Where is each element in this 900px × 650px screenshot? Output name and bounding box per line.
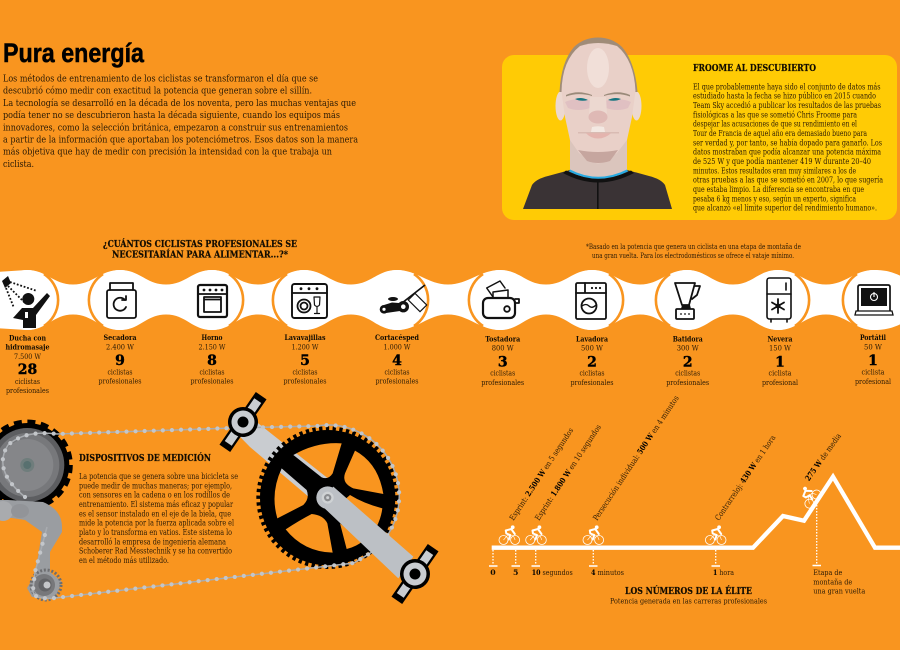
appliance label: nevera: ciclista <box>768 368 792 378</box>
appliance label: batidora <box>666 334 709 387</box>
appliance label: tostadora: profesionales <box>481 378 524 387</box>
appliance label: lavadora: profesionales <box>570 378 614 387</box>
intro text: descubrió cómo medir con exactitud la potencia que generan sobre el sillín. <box>3 86 312 97</box>
appliance label: cortacésped <box>375 333 419 386</box>
appliance label: nevera <box>762 334 798 387</box>
cyclist icon: 4 minutes <box>583 525 604 544</box>
text block: dispositivos de medición <box>79 452 238 565</box>
appliance label: nevera: profesional <box>762 378 798 387</box>
text block: dispositivos de medición: con sensores en la cadena o en los rodillos de <box>79 490 230 500</box>
intro text <box>3 74 359 170</box>
appliance label: lavadora: 2 <box>587 354 597 370</box>
footnote <box>586 242 801 260</box>
text block: dispositivos de medición: entrenamiento. El sistema más eficaz y popular <box>79 499 233 509</box>
appliance label: horno <box>190 333 234 386</box>
appliance label: batidora: Batidora <box>673 334 703 344</box>
white icon circles <box>0 270 900 330</box>
time axis labels <box>490 568 734 577</box>
text block: dispositivos de medición: DISPOSITIVOS DE MEDICIÓN <box>79 452 211 464</box>
elite numbers: tick marks <box>489 505 821 566</box>
appliance label: nevera: Nevera <box>768 334 792 344</box>
intro text: podía tener no se descubrieron hasta la década siguiente, cuando los equipos más <box>3 110 340 121</box>
mountain stage label <box>813 568 866 596</box>
footnote: una gran vuelta. Para los electrodomésticos se ofrece el vataje mínimo. <box>592 251 794 260</box>
rotated label: persecución: Persecución individual: 500 W en 4 minutos <box>591 394 681 522</box>
appliance label: secadora: 9 <box>115 353 125 369</box>
appliance label: horno: ciclistas <box>200 368 224 376</box>
appliance label: lavavajillas: 5 <box>300 353 310 369</box>
white wave band <box>0 270 900 330</box>
text block: dispositivos de medición: mide la potencia por la fuerza aplicada sobre el <box>79 518 234 528</box>
text block: dispositivos de medición: La potencia que se genera sobre una bicicleta se <box>79 471 238 481</box>
appliance label: tostadora: 800 W <box>492 344 514 352</box>
intro text: Los métodos de entrenamiento de los ciclistas se transformaron el día que se <box>3 74 318 84</box>
appliance label: cortacésped: profesionales <box>376 377 418 386</box>
rotated label: montaña: 275 W de media <box>803 432 843 483</box>
panel text: Froome al descubierto <box>693 64 883 213</box>
appliance label: ducha: hidromasaje <box>6 343 50 352</box>
cyclist icon: climbing <box>795 482 823 510</box>
icon: washing machine <box>576 283 606 319</box>
icon: dishwasher <box>292 284 327 318</box>
chainring and upper crank arm (zoomed coordinates) <box>235 412 397 567</box>
appliance label: tostadora: ciclistas <box>490 368 515 378</box>
title: Pura energía <box>3 38 145 68</box>
appliance label: portátil: ciclista <box>862 368 885 376</box>
appliance label: ducha: 7.500 W <box>14 352 41 361</box>
appliance label: ducha: Ducha con <box>9 333 46 342</box>
appliance label: cortacésped: 4 <box>392 353 402 369</box>
rotated label: esprint 10 s: Esprint: 1.800 W en 10 segundos <box>533 423 603 522</box>
appliance label: portátil <box>855 333 891 386</box>
appliance label: cortacésped: Cortacésped <box>375 333 419 342</box>
appliance label: secadora: Secadora <box>104 333 136 342</box>
appliance label: portátil: 1 <box>868 353 878 369</box>
time axis labels: 10 segundos <box>532 568 573 577</box>
intro text: La tecnología se desarrolló en la década de los noventa, pero las muchas ventajas que <box>3 98 356 109</box>
appliance label: lavadora: ciclistas <box>580 368 604 378</box>
upper pedal <box>212 387 274 457</box>
footnote: *Basado en la potencia que genera un ciclista en una etapa de montaña de <box>586 242 801 251</box>
panel text: Froome al descubierto: FROOME AL DESCUBIERTO <box>693 64 816 74</box>
heading: los números de la élite <box>610 585 767 606</box>
icon: toaster <box>483 281 519 318</box>
derailleur <box>0 500 62 600</box>
chain <box>3 425 399 598</box>
heading: appliances: NECESITARÍAN PARA ALIMENTAR...?* <box>112 248 288 260</box>
heading: los números de la élite: LOS NÚMEROS DE LA ÉLITE <box>625 585 752 597</box>
text block: dispositivos de medición: plato y lo transforma en vatios. Este sistema lo <box>79 527 232 537</box>
appliance label: batidora: ciclistas <box>675 368 700 378</box>
intro text: innovadores, como la selección británica, empezaron a construir sus entrenamientos <box>3 122 348 133</box>
appliance label: lavavajillas: Lavavajillas <box>284 333 326 342</box>
icon: shower <box>2 276 50 328</box>
orange separators between circles <box>44 274 857 326</box>
mountain stage label: Etapa de <box>813 568 843 577</box>
text block: dispositivos de medición: en el método más utilizado. <box>79 555 169 565</box>
appliance label: ducha: 28 <box>18 362 37 378</box>
appliance label: lavavajillas: 1.200 W <box>292 342 318 352</box>
appliance label: ducha: ciclistas <box>15 377 40 386</box>
lower pedal <box>384 539 446 609</box>
appliance label: lavavajillas <box>284 333 326 386</box>
appliance label: portátil: 50 W <box>864 342 882 352</box>
appliance label: ducha: profesionales <box>6 386 49 395</box>
appliance label: batidora: profesionales <box>666 378 709 387</box>
cyclist icon: 5 seconds <box>499 525 520 544</box>
appliance label: nevera: 1 <box>775 354 785 370</box>
portrait of Froome <box>523 38 672 209</box>
appliance label: lavadora: 500 W <box>581 344 603 352</box>
appliance label: tostadora: 3 <box>498 354 508 370</box>
intro text: más objetiva que hay de medir con precisión la intensidad con la que trabaja un <box>3 147 332 158</box>
text block: dispositivos de medición: desarrolló la empresa de ingeniería alemana <box>79 536 226 546</box>
text block: dispositivos de medición: es el sensor instalado en el eje de la biela, que <box>79 508 231 518</box>
icon: dryer <box>107 283 136 318</box>
appliance label: horno: Horno <box>202 333 222 342</box>
mountain stage label: montaña de <box>813 577 853 586</box>
text block: dispositivos de medición: puede medir de muchas maneras; por ejemplo, <box>79 480 232 490</box>
appliance label: secadora: profesionales <box>98 377 142 386</box>
appliance label: horno: 2.150 W <box>198 342 226 352</box>
appliance label: portátil: Portátil <box>860 333 886 342</box>
text block: dispositivos de medición: Schoberer Rad Messtechnik y se ha convertido <box>79 546 232 556</box>
appliance label: secadora <box>98 333 142 386</box>
icon: lawn mower <box>380 285 427 314</box>
appliance label: tostadora <box>481 334 524 387</box>
intro text: a partir de la información que aportaban los potenciómetros. Esos datos son la manera <box>3 134 359 146</box>
rotated label: contrarreloj: Contrarreloj: 430 W en 1 hora <box>713 433 778 522</box>
appliance label: lavavajillas: profesionales <box>284 377 326 386</box>
elite numbers: route line <box>492 477 900 548</box>
time axis labels: 1 hora <box>713 568 734 577</box>
icon: fridge <box>767 278 791 322</box>
appliance label: horno: profesionales <box>190 377 234 386</box>
appliance label: batidora: 300 W <box>677 344 699 352</box>
time axis labels: 4 minutos <box>591 568 624 577</box>
appliance label: lavavajillas: ciclistas <box>292 368 318 376</box>
appliance label: nevera: 150 W <box>769 344 791 352</box>
appliance label: secadora: 2.400 W <box>106 342 134 352</box>
cyclist icon: 1 hour <box>705 525 726 544</box>
lower crank arm <box>316 486 413 578</box>
appliance label: lavadora <box>570 334 614 387</box>
rear sprocket <box>0 422 71 508</box>
bicycle drivetrain illustration <box>0 387 446 609</box>
mountain stage label: una gran vuelta <box>813 587 866 596</box>
icon: laptop <box>855 285 893 315</box>
appliance label: cortacésped: ciclistas <box>384 368 410 376</box>
appliance label: cortacésped: 1.000 W <box>384 342 410 352</box>
intro text: ciclista. <box>3 160 34 170</box>
appliance label: horno: 8 <box>207 353 217 369</box>
appliance label: portátil: profesional <box>855 377 891 386</box>
appliance label: tostadora: Tostadora <box>485 334 520 344</box>
time axis labels: 5 <box>513 568 518 577</box>
heading: appliances <box>103 238 297 260</box>
appliance label: secadora: ciclistas <box>108 368 132 376</box>
appliance label: batidora: 2 <box>683 354 693 370</box>
heading: appliances: ¿CUÁNTOS CICLISTAS PROFESIONALES SE <box>103 238 297 250</box>
time axis labels: 0 <box>490 568 496 577</box>
icon: oven <box>198 285 227 317</box>
cyclist icon: 10 seconds <box>526 525 546 544</box>
appliance label: lavadora: Lavadora <box>576 334 608 344</box>
rotated label: esprint 5 s: Esprint: 2.500 W en 5 segundos <box>508 426 575 522</box>
panel: Froome <box>502 55 897 220</box>
appliance label: ducha <box>6 333 50 395</box>
heading: los números de la élite: Potencia generada en las carreras profesionales <box>610 596 767 606</box>
icon: blender <box>675 283 700 319</box>
